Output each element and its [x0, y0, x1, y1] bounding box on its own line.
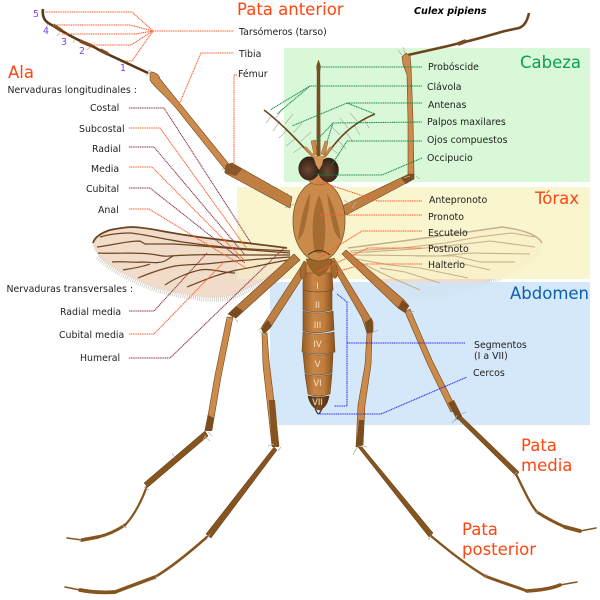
transverse veins labels: Humeral — [80, 353, 120, 364]
segment VI — [305, 374, 332, 396]
hind left leg — [65, 262, 310, 592]
heading: Pata media: media — [521, 456, 572, 475]
head labels: Ojos compuestos — [427, 135, 508, 146]
leg labels: Fémur — [238, 69, 268, 80]
leg labels — [238, 27, 327, 80]
head labels — [427, 62, 508, 164]
tarsomere numbers: 3 — [61, 37, 67, 48]
tarsomere numbers: 2 — [79, 46, 85, 57]
longitudinal veins labels: Nervaduras longitudinales : — [8, 85, 137, 96]
head labels: Antenas — [428, 100, 466, 111]
segment numerals: III — [314, 321, 321, 331]
abdomen with segments — [302, 262, 335, 414]
head leader lines — [270, 67, 422, 175]
heading: Pata posterior: posterior — [462, 540, 536, 559]
segment III — [303, 311, 334, 333]
transverse veins labels — [6, 284, 133, 364]
segment numerals: I — [316, 282, 319, 292]
longitudinal veins labels: Media — [91, 164, 119, 175]
hind right leg — [329, 258, 577, 591]
thorax labels: Postnoto — [428, 244, 469, 255]
thorax labels — [428, 195, 487, 271]
front right leg — [342, 13, 529, 215]
heading: Cabeza: Cabeza — [520, 53, 581, 72]
middle left leg — [67, 254, 300, 542]
longitudinal veins labels: Costal — [90, 103, 119, 114]
longitudinal veins labels: Anal — [98, 205, 119, 216]
panel: Abdomen background — [270, 282, 590, 425]
segment numerals: V — [315, 360, 321, 370]
heading: Pata posterior: Pata — [462, 520, 498, 539]
antennae with hairs — [264, 108, 375, 158]
segment numerals: VII — [312, 398, 323, 408]
heading: Tórax: Tórax — [534, 189, 579, 208]
front left leg — [43, 9, 294, 208]
heading: Pata anterior: Pata anterior — [237, 0, 344, 19]
transverse veins labels: Nervaduras transversales : — [6, 284, 133, 295]
segment numerals: IV — [313, 340, 322, 350]
halteres and scutellum base — [300, 259, 338, 278]
abdomen labels: (I a VII) — [474, 351, 508, 362]
segment numerals — [312, 282, 323, 408]
thorax leader lines — [317, 181, 422, 272]
maxillary palps — [311, 140, 328, 155]
transverse veins labels: Radial media — [60, 307, 121, 318]
tarsomere numbers — [33, 9, 126, 74]
left wing — [93, 227, 291, 299]
right wing membrane (behind panels) — [345, 227, 542, 297]
head labels: Clávola — [427, 82, 462, 93]
leg labels: Tarsómeros (tarso) — [238, 27, 327, 38]
longitudinal veins labels: Cubital — [86, 184, 119, 195]
abdomen labels: Cercos — [473, 368, 505, 379]
cercos — [315, 409, 322, 414]
thorax labels: Halterio — [428, 260, 465, 271]
icon: left compound eye — [299, 157, 319, 180]
heading: Pata media: Pata — [521, 436, 557, 455]
tarsomere numbers: 1 — [120, 63, 126, 74]
icon: right compound eye — [318, 158, 338, 182]
panel: Cabeza background — [284, 48, 590, 182]
segment II — [303, 290, 332, 312]
proboscis — [316, 60, 320, 156]
transverse veins labels: Cubital media — [59, 330, 124, 341]
right wing veins — [348, 227, 542, 290]
head labels: Probóscide — [428, 62, 479, 73]
segment numerals: II — [315, 301, 320, 311]
thorax labels: Escutelo — [428, 228, 468, 239]
abdomen labels — [473, 340, 527, 379]
middle right leg — [342, 250, 596, 531]
tibia and femur lines — [178, 53, 237, 165]
head with eyes — [299, 156, 338, 185]
head labels: Occipucio — [427, 153, 473, 164]
thorax — [293, 181, 345, 261]
segment IV — [302, 332, 335, 354]
wing vein leader lines — [129, 108, 284, 358]
heading: Abdomen: Abdomen — [510, 284, 589, 303]
longitudinal veins labels — [8, 85, 137, 216]
leg labels: Tibia — [238, 49, 261, 60]
longitudinal veins labels: Radial — [92, 144, 121, 155]
longitudinal veins labels: Subcostal — [79, 124, 125, 135]
heading: species name: Culex pipiens — [414, 6, 487, 17]
thorax labels: Antepronoto — [429, 195, 487, 206]
abdomen leader lines — [318, 294, 467, 414]
segment V — [303, 353, 333, 375]
tarsomere lines — [45, 12, 234, 61]
segment VII — [308, 396, 329, 410]
tarsomere numbers: 5 — [33, 9, 39, 20]
tarsomere numbers: 4 — [43, 26, 49, 37]
heading: Ala: Ala — [8, 63, 34, 82]
segment I — [303, 273, 333, 292]
panel: Tórax background — [237, 187, 590, 279]
thorax labels: Pronoto — [428, 212, 464, 223]
abdomen labels: Segmentos — [474, 340, 527, 351]
segment numerals: VI — [313, 379, 322, 389]
head labels: Palpos maxilares — [427, 117, 506, 128]
